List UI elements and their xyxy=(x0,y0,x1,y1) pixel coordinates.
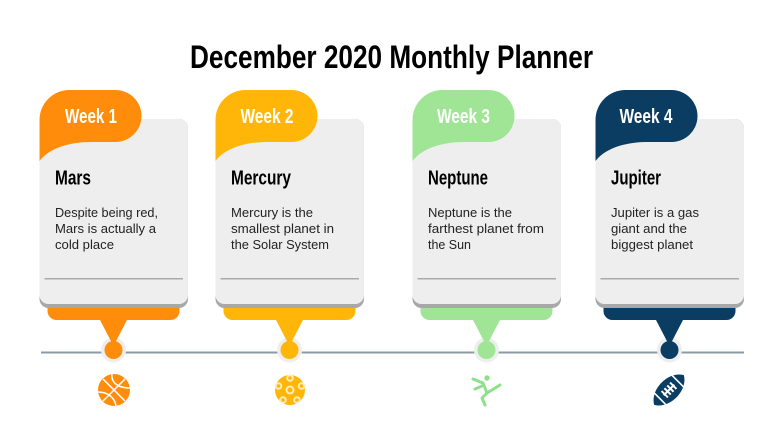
panel: week 3 Neptune xyxy=(412,90,561,346)
body text xyxy=(55,205,158,252)
heading: Jupiter xyxy=(611,168,661,190)
lower colored bar and pointer xyxy=(48,306,180,346)
icon: soccer ball xyxy=(275,375,305,405)
lower colored bar and pointer xyxy=(420,306,552,346)
timeline line xyxy=(41,352,744,354)
body text: Jupiter is a gas xyxy=(611,205,699,220)
card xyxy=(40,119,188,308)
body text: Mercury is the xyxy=(231,205,313,220)
panel: week 1 Mars xyxy=(40,90,188,346)
body text: Mars is actually a xyxy=(55,221,157,236)
icon: kicking player xyxy=(473,375,500,405)
body text: Despite being red, xyxy=(55,205,158,220)
body text: the Sun xyxy=(428,237,471,252)
body text: smallest planet in xyxy=(231,221,334,236)
marker: week 3 xyxy=(474,338,499,362)
tab xyxy=(412,90,514,161)
body text: cold place xyxy=(55,237,114,252)
icon: basketball xyxy=(98,374,130,406)
body text xyxy=(428,205,544,252)
tab xyxy=(216,90,318,161)
marker: week 1 xyxy=(101,338,126,362)
tab xyxy=(40,90,142,161)
title: December 2020 Monthly Planner xyxy=(190,39,593,75)
icon: american football xyxy=(647,368,691,412)
card xyxy=(412,119,561,308)
body text xyxy=(231,205,334,252)
tab label: Week 4 xyxy=(620,106,673,128)
body text xyxy=(611,205,699,252)
tab label: Week 1 xyxy=(65,106,117,128)
tab xyxy=(596,90,698,161)
tab label: Week 3 xyxy=(437,106,490,128)
marker: week 4 xyxy=(657,338,682,362)
panel: week 2 Mercury xyxy=(216,90,364,346)
card xyxy=(216,119,364,308)
lower colored bar and pointer xyxy=(224,306,356,346)
heading: Mars xyxy=(55,168,91,190)
body text: giant and the xyxy=(611,221,687,236)
lower colored bar and pointer xyxy=(604,306,736,346)
body text: Neptune is the xyxy=(428,205,512,220)
heading: Mercury xyxy=(231,168,292,190)
tab label: Week 2 xyxy=(240,106,294,128)
body text: the Solar System xyxy=(231,237,329,252)
card xyxy=(596,119,744,308)
heading: Neptune xyxy=(428,168,488,190)
body text: farthest planet from xyxy=(428,221,544,236)
marker: week 2 xyxy=(277,338,302,362)
body text: biggest planet xyxy=(611,237,693,252)
panel: week 4 Jupiter xyxy=(596,90,744,346)
